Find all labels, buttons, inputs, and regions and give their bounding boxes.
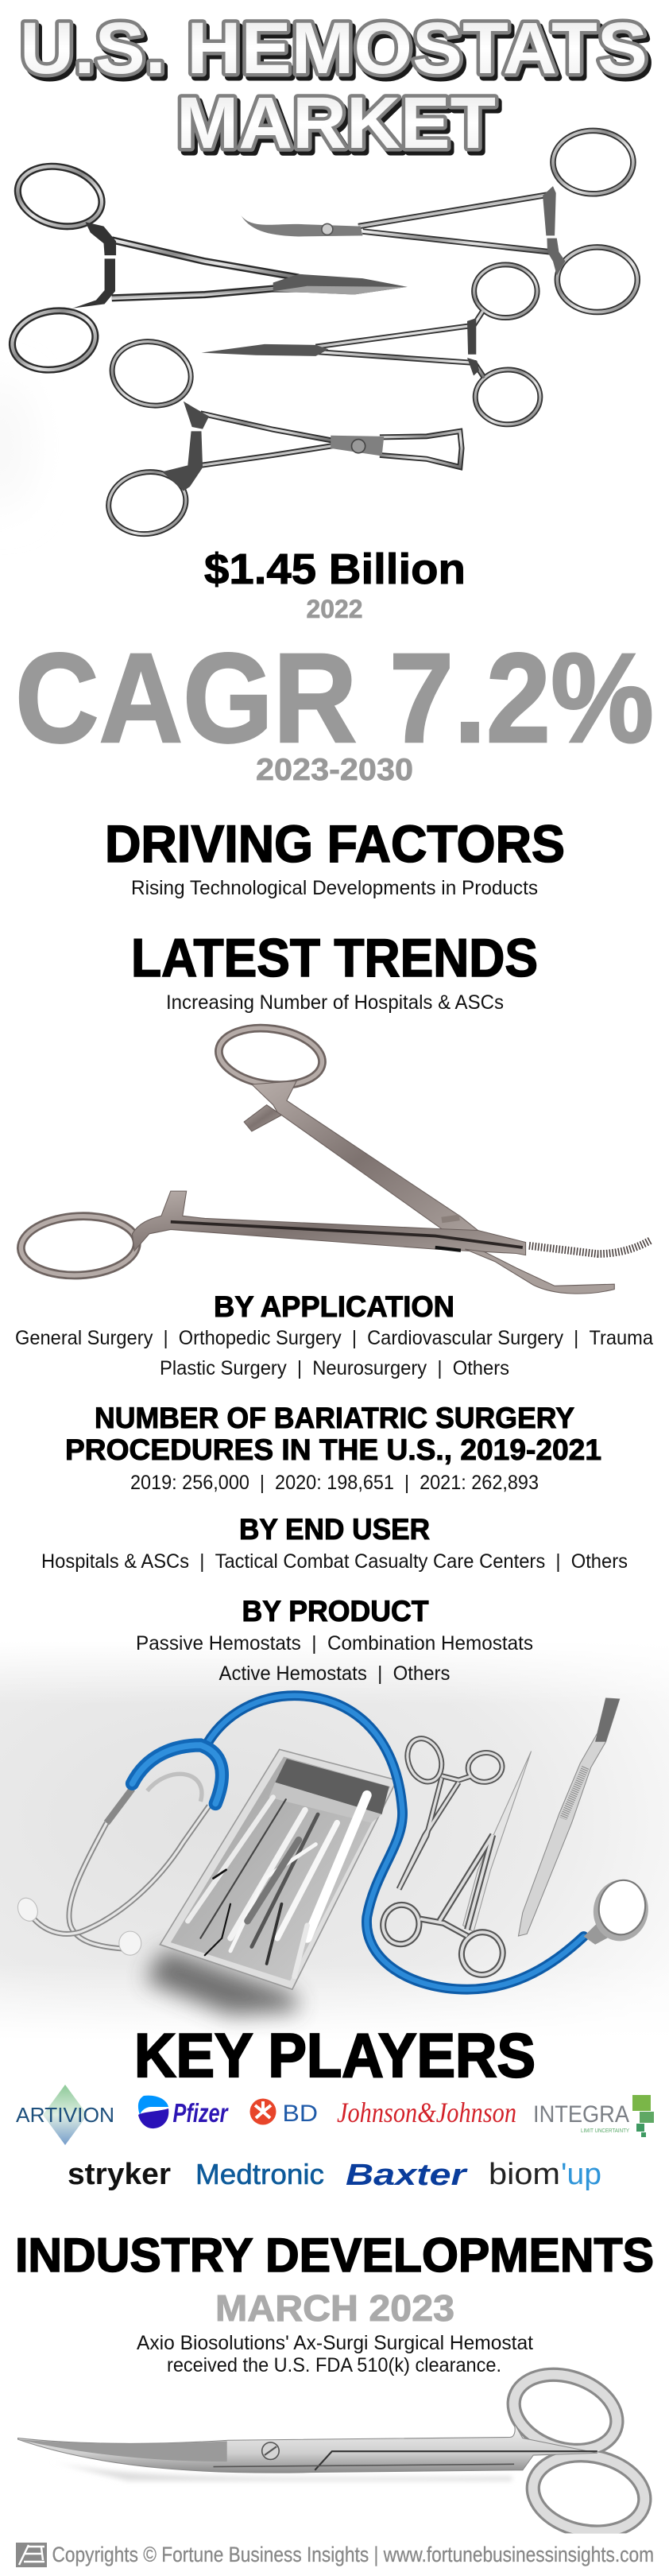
title (20, 8, 651, 168)
hemostat: left large (7, 158, 408, 376)
title: U.S. HEMOSTATS (20, 8, 648, 89)
logo: Integra: LIMIT UNCERTAINTY (581, 2128, 629, 2134)
title: U.S. HEMOSTATS (23, 12, 651, 93)
footer (16, 2543, 654, 2567)
logo: Medtronic: Medtronic (195, 2158, 324, 2190)
upper arm (252, 1081, 478, 1231)
image: stethoscope and surgical tools (0, 1641, 669, 2040)
logo: BD: BD (283, 2101, 318, 2127)
icon: Fortune Business Insights mark (16, 2543, 47, 2567)
heading: bariatric surgery procedures (65, 1402, 601, 1466)
scissors hemostat upper (399, 1734, 505, 1889)
development text: received the U.S. FDA 510(k) clearance. (167, 2354, 501, 2376)
heading: industry developments: INDUSTRY DEVELOPMENTS (15, 2229, 654, 2282)
title: MARKET (176, 83, 496, 164)
CAGR period: 2023-2030 (256, 753, 413, 787)
development text: Axio Biosolutions' Ax-Surgi Surgical Hemostat (137, 2332, 533, 2354)
logo: Artivion: ARTIVION (16, 2103, 114, 2127)
logo: Integra (533, 2095, 654, 2137)
logo: Integra: INTEGRA (533, 2101, 629, 2128)
logo: biom'up: biom (489, 2158, 560, 2191)
hemostat: upper right curved (241, 130, 637, 312)
image: curved surgical scissors (18, 2362, 651, 2540)
application segments line 2: Plastic Surgery | Neurosurgery | Others (160, 1357, 509, 1379)
thin forceps centre (463, 1752, 532, 1932)
heading: key players: KEY PLAYERS (134, 2020, 536, 2090)
heading: latest trends: LATEST TRENDS (131, 928, 538, 988)
tissue forceps right (518, 1698, 620, 1936)
heading: bariatric surgery procedures: NUMBER OF BARIATRIC SURGERY (95, 1402, 574, 1434)
product segments: Active Hemostats | Others (219, 1662, 450, 1685)
logo: Pfizer (138, 2096, 229, 2128)
logo: biom'up: 'up (561, 2158, 601, 2191)
title: U.S. HEMOSTATS (20, 8, 648, 89)
logos: key players (16, 2085, 654, 2192)
development date: MARCH 2023 (215, 2287, 454, 2329)
logo: Artivion (16, 2085, 114, 2145)
end user segments: Hospitals & ASCs | Tactical Combat Casualty Care Centers | Others (41, 1550, 628, 1573)
logo: Pfizer: Pfizer (173, 2098, 229, 2128)
logo: Baxter: Baxter (346, 2159, 468, 2192)
heading: bariatric surgery procedures: PROCEDURES IN THE U.S., 2019-2021 (65, 1433, 601, 1466)
title: MARKET (180, 87, 499, 168)
logo: BD (249, 2099, 318, 2127)
product segments: Passive Hemostats | Combination Hemostats (136, 1632, 533, 1655)
logo: biom'up (489, 2158, 601, 2191)
tray (160, 1749, 396, 1989)
driving factor text: Rising Technological Developments in Products (131, 877, 538, 899)
tray shadow (145, 1949, 299, 2015)
title: MARKET (176, 83, 496, 164)
heading: by application: BY APPLICATION (214, 1290, 454, 1323)
hemostat: middle straight (201, 265, 540, 425)
ratchet (244, 1105, 281, 1131)
logo: Johnson & Johnson: Johnson&Johnson (337, 2097, 516, 2128)
hemostat: lower wide jaw (103, 335, 462, 540)
market size year: 2022 (307, 595, 362, 623)
earpieces (14, 1895, 141, 1955)
lower curved jaw (465, 1249, 614, 1294)
stethoscope tubing: silver (32, 1774, 209, 1949)
heading: by end user: BY END USER (239, 1513, 430, 1546)
heading: driving factors: DRIVING FACTORS (105, 814, 565, 873)
chest piece (584, 1876, 653, 1946)
blue tube (132, 1696, 584, 1989)
latest trend text: Increasing Number of Hospitals & ASCs (166, 991, 504, 1014)
image: four hemostats on white (0, 80, 669, 541)
heading: by product: BY PRODUCT (242, 1595, 429, 1627)
product segments (136, 1632, 533, 1685)
logo: Stryker: stryker (68, 2158, 171, 2191)
bariatric surgery figures: 2019: 256,000 | 2020: 198,651 | 2021: 262,893 (130, 1472, 539, 1494)
development text (137, 2332, 533, 2376)
market size value: $1.45 Billion (204, 545, 466, 593)
long arm with ratchet nub (132, 1191, 526, 1255)
image: open curved forceps (19, 1022, 652, 1294)
scissors hemostat lower (380, 1835, 508, 1980)
